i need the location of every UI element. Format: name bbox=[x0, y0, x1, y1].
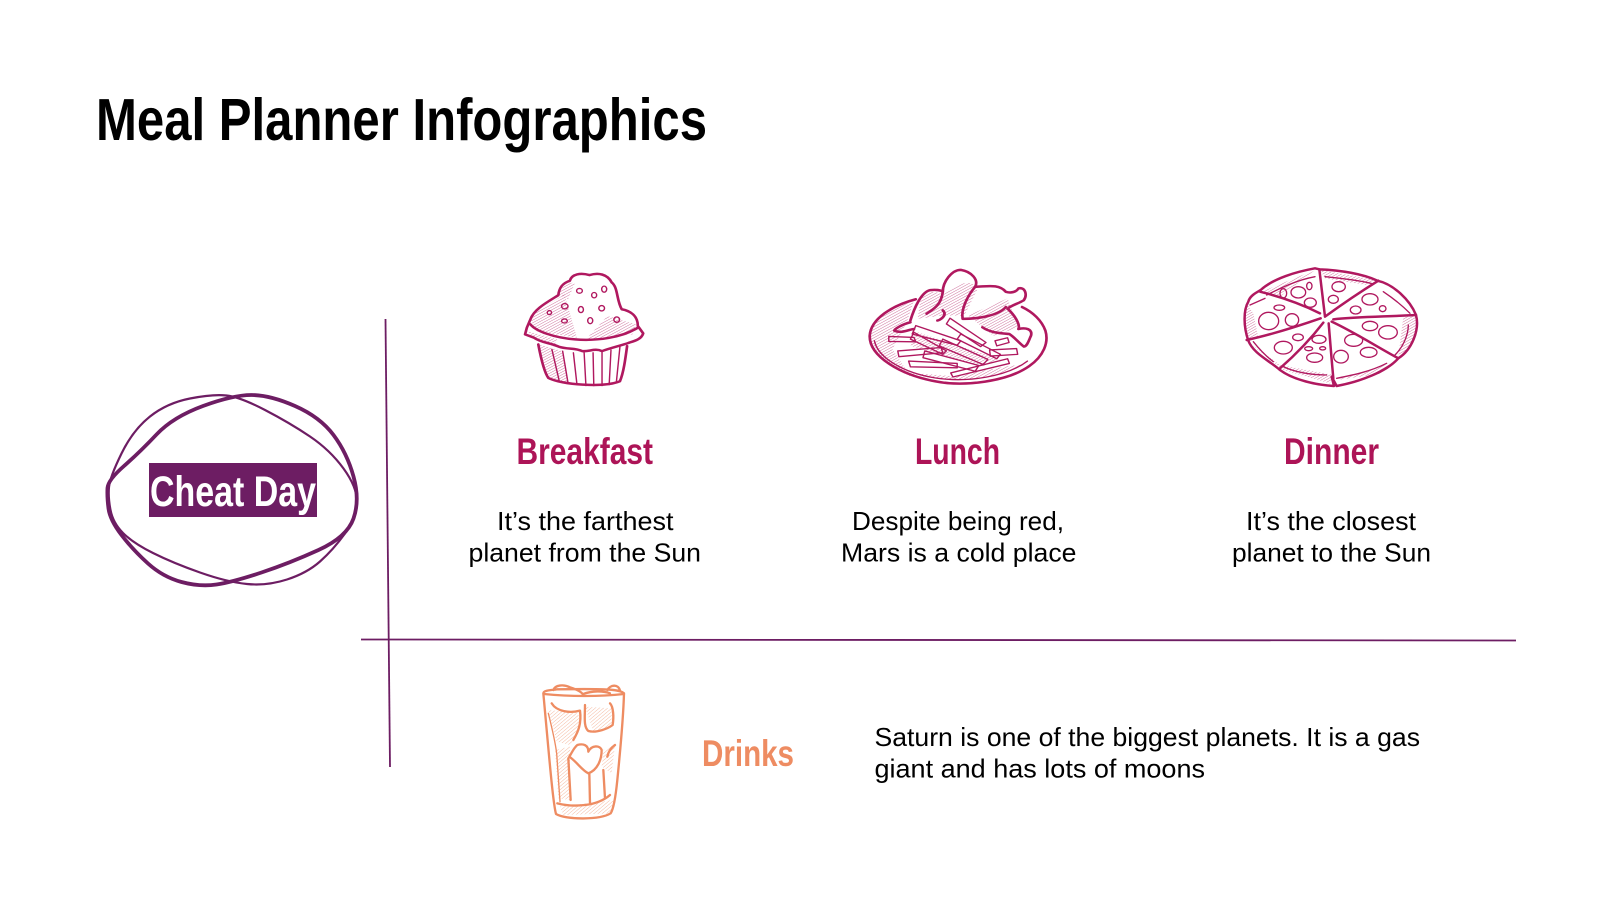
lunch description: Mars is a cold place bbox=[841, 538, 1076, 568]
icon: pizza bbox=[1245, 268, 1417, 386]
drinks description: Saturn is one of the biggest planets. It is a gas bbox=[874, 722, 1420, 752]
label box bbox=[149, 463, 317, 517]
cheat day badge bbox=[107, 395, 357, 585]
icon: plate of chicken and fries bbox=[870, 270, 1046, 384]
dinner description bbox=[1232, 506, 1431, 568]
dinner description: planet to the Sun bbox=[1232, 538, 1431, 568]
lunch description: Despite being red, bbox=[852, 506, 1064, 536]
breakfast description: planet from the Sun bbox=[468, 538, 701, 568]
breakfast description: It’s the farthest bbox=[497, 506, 674, 536]
dinner heading: Dinner bbox=[1284, 431, 1379, 472]
title: Meal Planner Infographics bbox=[96, 87, 707, 153]
icon: muffin bbox=[525, 274, 643, 386]
drinks description bbox=[874, 722, 1420, 784]
icon: glass of drink bbox=[543, 685, 624, 818]
label text: Cheat Day bbox=[150, 468, 316, 516]
lunch heading: Lunch bbox=[915, 431, 1000, 472]
hand-drawn ellipse outline bbox=[107, 395, 357, 585]
grid lines bbox=[361, 319, 1516, 767]
drinks heading: Drinks bbox=[702, 733, 794, 774]
dinner description: It’s the closest bbox=[1246, 506, 1417, 536]
breakfast heading: Breakfast bbox=[516, 431, 653, 472]
lunch description bbox=[841, 506, 1076, 568]
drinks description: giant and has lots of moons bbox=[874, 754, 1205, 784]
breakfast description bbox=[468, 506, 701, 568]
